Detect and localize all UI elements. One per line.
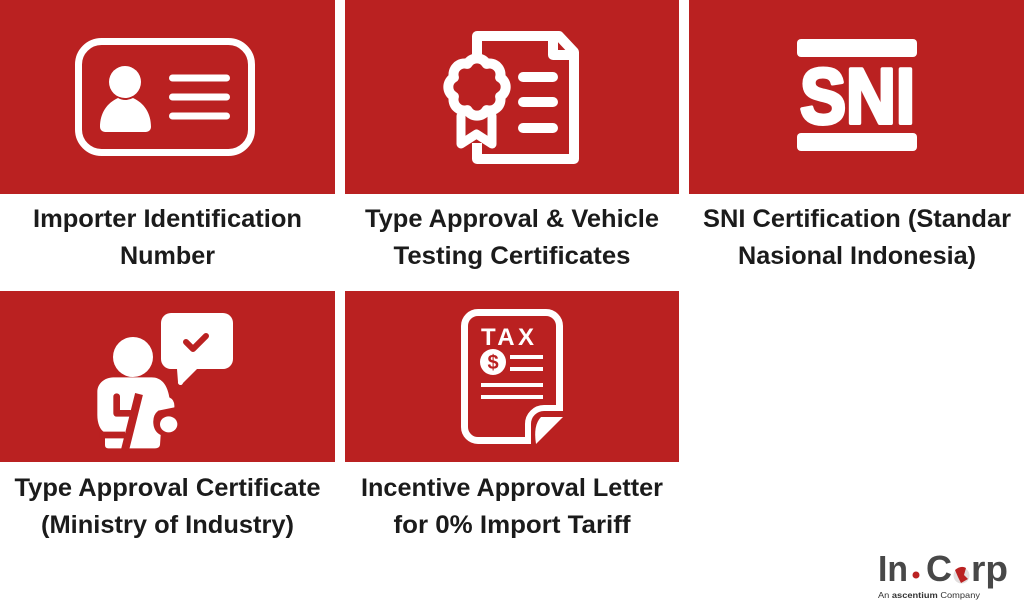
logo: incorp <box>878 548 1008 600</box>
logo globe <box>954 567 970 584</box>
logo tagline: An ascentium Company <box>878 590 981 600</box>
caption: SNI Certification (Standar <box>703 205 1011 233</box>
caption: Type Approval Certificate <box>14 474 321 502</box>
icon: tax document: $ <box>487 352 499 374</box>
logo red dot <box>912 572 920 578</box>
icon: tax document: TAX <box>481 324 534 351</box>
panel background <box>0 291 335 462</box>
panel background <box>345 0 679 194</box>
icon: id card <box>78 42 252 152</box>
icon: sni mark: SNI <box>800 52 915 140</box>
caption: Importer Identification <box>33 205 302 233</box>
caption: Type Approval & Vehicle <box>365 205 659 233</box>
caption second line: Number <box>120 242 215 270</box>
logo wordmark left: In <box>878 548 908 589</box>
caption second line: for 0% Import Tariff <box>394 511 631 539</box>
panel: incentive approval letter <box>345 291 679 539</box>
caption second line: Testing Certificates <box>394 242 630 270</box>
panel: sni certification <box>689 0 1024 270</box>
caption second line: Nasional Indonesia) <box>738 242 976 270</box>
caption: Incentive Approval Letter <box>361 474 663 502</box>
panel: type approval and vehicle testing <box>345 0 679 270</box>
panel: importer identification <box>0 0 335 270</box>
logo wordmark rp: rp <box>971 548 1008 589</box>
panel background <box>345 291 679 462</box>
icon: certificate document <box>448 36 574 159</box>
logo wordmark c: C <box>926 548 952 589</box>
icon: tax document <box>464 312 563 444</box>
caption second line: (Ministry of Industry) <box>41 511 294 539</box>
panel: type approval ministry of industry <box>0 291 335 539</box>
panel background <box>0 0 335 194</box>
icon: person with speech bubble <box>97 313 233 450</box>
panel background <box>689 0 1024 194</box>
